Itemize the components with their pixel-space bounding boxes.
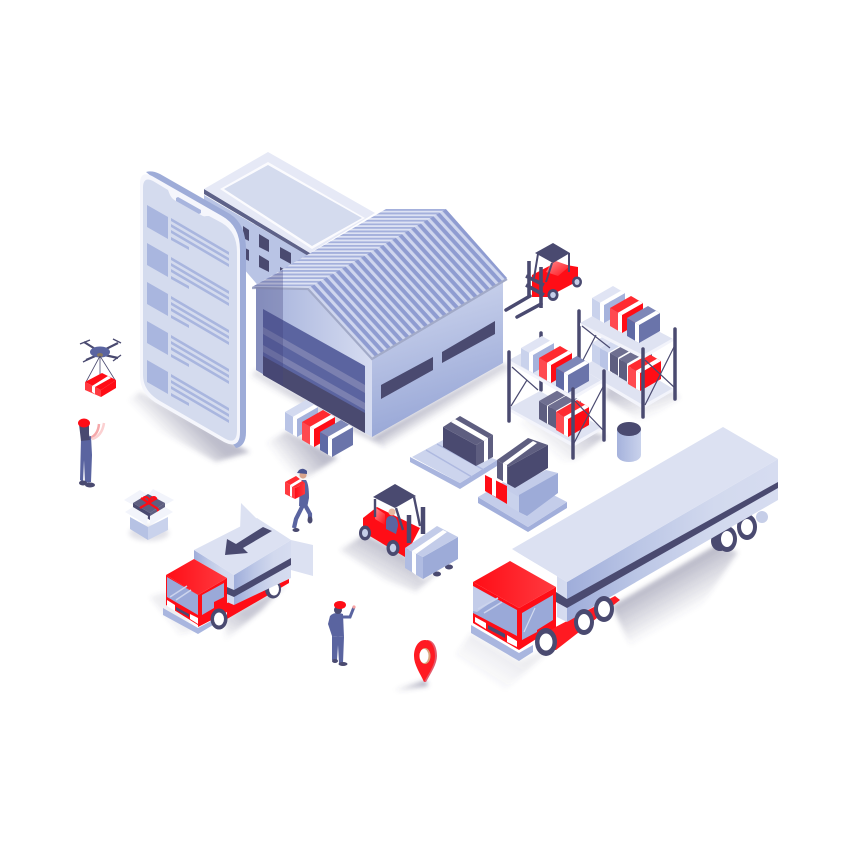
shadow [225, 585, 285, 640]
wheels [548, 289, 558, 301]
feet [332, 659, 338, 663]
phone [140, 171, 246, 448]
forklift body [532, 263, 578, 297]
cab [471, 561, 556, 661]
parcel [85, 373, 116, 397]
building wall with windows [204, 195, 312, 290]
person: pointing [328, 601, 356, 666]
windshield [167, 577, 198, 615]
fork tips [433, 572, 441, 576]
head [334, 606, 342, 614]
phone speaker [176, 197, 201, 214]
wheels [359, 526, 371, 540]
warehouse [252, 209, 507, 437]
load box [405, 548, 423, 579]
forklift body [363, 507, 420, 557]
cargo box [194, 550, 234, 605]
gift [133, 494, 165, 513]
drone [80, 339, 121, 397]
back building [204, 152, 375, 290]
small truck [150, 503, 313, 640]
door top flap [240, 503, 257, 530]
shadow [340, 534, 440, 592]
location pin [392, 640, 437, 691]
legs and body [80, 436, 92, 483]
strings [86, 356, 115, 390]
door right [291, 540, 313, 576]
lights [167, 600, 175, 611]
shadow [605, 375, 680, 422]
forks [506, 296, 541, 317]
mast [375, 497, 420, 530]
person: courier with parcel [285, 469, 312, 532]
barrel [617, 422, 641, 462]
lower plate [509, 391, 603, 445]
dark box on top [497, 460, 515, 488]
pallet [478, 497, 567, 532]
shadow: warehouse gable [248, 370, 385, 447]
pallet [410, 457, 497, 489]
torso [328, 613, 344, 637]
side window [522, 595, 553, 640]
upper plate [580, 306, 675, 357]
building roof slab [204, 152, 375, 253]
trailer [512, 549, 567, 622]
shelf: back [579, 286, 680, 422]
middle wheels [574, 609, 594, 635]
blue box [507, 490, 527, 517]
warehouse side wall [372, 282, 503, 437]
arms [84, 342, 118, 360]
trailer stripe [556, 482, 778, 608]
dark box [443, 427, 476, 466]
cab posts [534, 253, 569, 282]
parcel [285, 476, 305, 499]
shadow [129, 525, 169, 541]
flaps back [124, 490, 150, 505]
rear wheel [265, 580, 281, 598]
arrow [225, 527, 272, 555]
upper plate [509, 343, 603, 398]
warehouse door [263, 309, 365, 433]
driver [386, 508, 398, 534]
mast [526, 261, 544, 308]
red box [485, 475, 507, 504]
feet [79, 480, 87, 486]
cab [163, 559, 227, 634]
shadow [505, 415, 606, 465]
forklift: front with load [340, 484, 458, 592]
chassis [227, 571, 289, 619]
shadow: warehouse side [372, 363, 514, 447]
shadow [392, 680, 428, 691]
cab roof [373, 484, 416, 508]
bumper [163, 608, 213, 634]
pallet with dark box [410, 416, 497, 489]
warehouse roof back slope [252, 209, 446, 288]
phone side [146, 171, 246, 448]
phone face [140, 174, 240, 444]
warehouse windows [381, 357, 433, 399]
open gift box [124, 489, 174, 541]
side window [202, 583, 224, 615]
cap [78, 418, 90, 428]
legs [294, 505, 310, 528]
head [299, 471, 307, 479]
front wheel [535, 628, 557, 656]
red chassis [540, 596, 620, 650]
warehouse roof front slope [308, 209, 507, 358]
phone list rows [147, 205, 229, 423]
headlights [475, 617, 486, 629]
front wheel [210, 608, 228, 630]
lower plate [580, 351, 675, 408]
propellers [80, 339, 121, 362]
feet [292, 528, 300, 532]
shelf: front [505, 333, 606, 465]
cab roof [535, 243, 570, 263]
box pile by warehouse [285, 400, 353, 457]
waving arms [90, 424, 99, 438]
rear wheels [756, 511, 768, 523]
big truck [455, 427, 778, 690]
drone body [90, 346, 110, 358]
truck shadow [612, 545, 738, 650]
flaps front [125, 507, 148, 525]
warehouse gable wall [256, 288, 372, 437]
raised arm [342, 607, 354, 617]
shadow: phone [118, 392, 250, 462]
shadow: box pile [255, 431, 338, 480]
person: waving at drone [78, 418, 104, 488]
forklift: top [506, 243, 582, 317]
box body [130, 517, 148, 540]
hair [79, 424, 90, 441]
cap [334, 601, 346, 609]
legs [332, 636, 344, 663]
pallet with stacked boxes [478, 438, 567, 532]
bumper [471, 625, 533, 661]
windshield [473, 586, 517, 636]
torso [299, 480, 309, 508]
cargo stripe [227, 558, 291, 597]
phone shadow on warehouse [252, 270, 283, 386]
